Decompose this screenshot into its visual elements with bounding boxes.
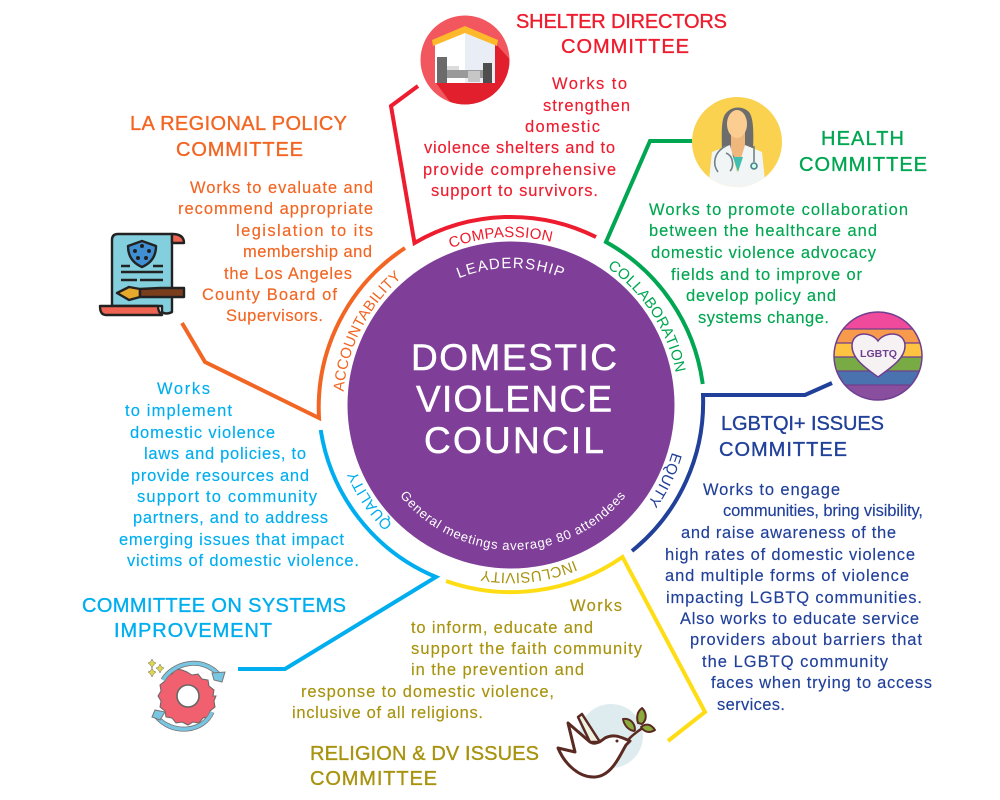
icon: doctor <box>692 97 782 190</box>
text: systems improvement description: laws and policies, to <box>144 445 306 463</box>
heading: Shelter Directors Committee: COMMITTEE <box>561 36 689 58</box>
text: systems improvement description: to implement <box>125 402 232 420</box>
text: systems improvement description: partners, and to address <box>133 509 328 527</box>
text: health description: Works to promote collaboration <box>649 201 908 219</box>
text: religion description: inclusive of all religions. <box>292 704 483 722</box>
heading: Health Committee <box>799 128 927 176</box>
text: religion description: to inform, educate and <box>411 619 593 637</box>
ring label: Accountability: ACCOUNTABILITY <box>334 270 398 392</box>
connector: policy (orange) <box>182 248 405 418</box>
heading: Committee on Systems Improvement <box>82 595 346 642</box>
heading: LA Regional Policy Committee <box>130 113 347 161</box>
title: Domestic Violence Council <box>411 337 617 461</box>
text: LGBTQI+ description: services. <box>717 696 785 714</box>
ring label: Collaboration: COLLABORATION <box>610 261 686 372</box>
text: LA regional policy description <box>178 179 373 325</box>
text: LGBTQI+ description: providers about barriers that <box>690 631 922 649</box>
heading: Religion & DV Issues Committee <box>310 743 539 790</box>
text: health description: domestic violence advocacy <box>651 244 877 262</box>
label: General meetings average 80 attendees: General meetings average 80 attendees <box>402 492 625 550</box>
text: LGBTQI+ description: faces when trying to access <box>711 674 932 692</box>
title: Domestic Violence Council: VIOLENCE <box>416 378 612 420</box>
text: LGBTQI+ description: Also works to educate service <box>680 610 919 628</box>
label: Leadership: LEADERSHIP <box>456 258 564 278</box>
text: shelter directors description <box>423 75 630 200</box>
connector: health (green) <box>606 141 703 384</box>
icon: gear with arrows <box>148 659 225 729</box>
text: systems improvement description: domestic violence <box>130 424 275 442</box>
heading: LA Regional Policy Committee: LA REGIONAL POLICY <box>130 113 347 135</box>
connector: religion (yellow) <box>446 557 705 741</box>
text: health description <box>649 201 908 327</box>
text: religion description <box>292 597 643 722</box>
heading: Committee on Systems Improvement: COMMITTEE ON SYSTEMS <box>82 595 346 617</box>
text: LA regional policy description: Works to evaluate and <box>190 179 373 197</box>
text: shelter directors description: Works to <box>552 75 627 93</box>
ring label: Inclusivity: INCLUSIVITY <box>480 561 577 584</box>
heading: LGBTQI+ Issues Committee: LGBTQI+ ISSUES <box>721 413 884 435</box>
text: systems improvement description: provide resources and <box>131 467 309 485</box>
ring label: Quality: QUALITY <box>347 474 390 529</box>
text: systems improvement description: emerging issues that impact <box>119 531 344 549</box>
heading: LGBTQI+ Issues Committee <box>719 413 884 461</box>
text: religion description: response to domestic violence, <box>301 683 554 701</box>
heading: LA Regional Policy Committee: COMMITTEE <box>176 139 303 161</box>
heading: Committee on Systems Improvement: IMPROVEMENT <box>114 620 272 642</box>
heading: Shelter Directors Committee: SHELTER DIRECTORS <box>516 11 727 33</box>
text: LGBTQI+ description: Works to engage <box>703 481 840 499</box>
title: Domestic Violence Council: DOMESTIC <box>411 337 617 378</box>
heading: Shelter Directors Committee <box>516 11 727 58</box>
connector: LGBTQI+ (navy) <box>632 383 832 551</box>
text: LA regional policy description: the Los Angeles <box>224 265 352 283</box>
text: LA regional policy description: membership and <box>243 243 372 261</box>
text: LGBTQI+ description: communities, bring visibility, <box>723 502 923 520</box>
text: religion description: Works <box>570 597 622 615</box>
text: LA regional policy description: County Board of <box>202 286 337 304</box>
text: LGBTQI+ description: impacting LGBTQ communities. <box>666 589 922 607</box>
ring label: Compassion: COMPASSION <box>449 226 552 247</box>
icon: LGBTQ badge <box>834 312 922 400</box>
text: systems improvement description <box>119 380 359 570</box>
heading: Health Committee: COMMITTEE <box>799 154 927 176</box>
text: LGBTQI+ description: the LGBTQ community <box>702 653 889 671</box>
icon: legal scroll and pen <box>100 234 184 315</box>
heading: Health Committee: HEALTH <box>821 128 904 150</box>
text: LGBTQI+ description <box>665 481 932 714</box>
ring label: Equity: EQUITY <box>650 453 682 508</box>
text: LA regional policy description: recommend appropriate <box>178 200 373 218</box>
connector: shelter directors (red) <box>391 86 596 243</box>
text: health description: fields and to improve or <box>671 266 862 284</box>
text: health description: develop policy and <box>686 287 836 305</box>
text: shelter directors description: domestic <box>525 118 600 136</box>
title: Domestic Violence Council: COUNCIL <box>424 420 604 461</box>
text: shelter directors description: violence shelters and to <box>424 139 615 157</box>
icon: shelter house <box>420 16 510 104</box>
central purple circle <box>348 242 674 568</box>
heading: LGBTQI+ Issues Committee: COMMITTEE <box>719 439 847 461</box>
text: shelter directors description: strengthen <box>543 97 630 115</box>
text: LA regional policy description: legislation to its <box>236 222 373 240</box>
icon: dove with olive branch <box>558 704 655 777</box>
text: LGBTQI+ description: and multiple forms of violence <box>665 567 909 585</box>
text: shelter directors description: support to survivors. <box>431 182 598 200</box>
text: health description: between the healthcare and <box>649 222 877 240</box>
text: health description: systems change. <box>698 309 829 327</box>
text: LA regional policy description: Supervisors. <box>226 307 323 325</box>
heading: Religion & DV Issues Committee: RELIGION & DV ISSUES <box>310 743 539 765</box>
icon: LGBTQ badge: LGBTQ <box>860 349 897 360</box>
text: religion description: in the prevention and <box>411 661 584 679</box>
text: shelter directors description: provide comprehensive <box>423 161 616 179</box>
text: LGBTQI+ description: and raise awareness of the <box>681 524 896 542</box>
connector: systems improvement (cyan) <box>238 430 436 669</box>
text: LGBTQI+ description: high rates of domestic violence <box>665 546 915 564</box>
text: systems improvement description: victims of domestic violence. <box>127 552 359 570</box>
text: systems improvement description: Works <box>157 380 210 398</box>
text: systems improvement description: support to community <box>137 488 318 506</box>
text: religion description: support the faith community <box>411 640 643 658</box>
heading: Religion & DV Issues Committee: COMMITTEE <box>310 768 437 790</box>
